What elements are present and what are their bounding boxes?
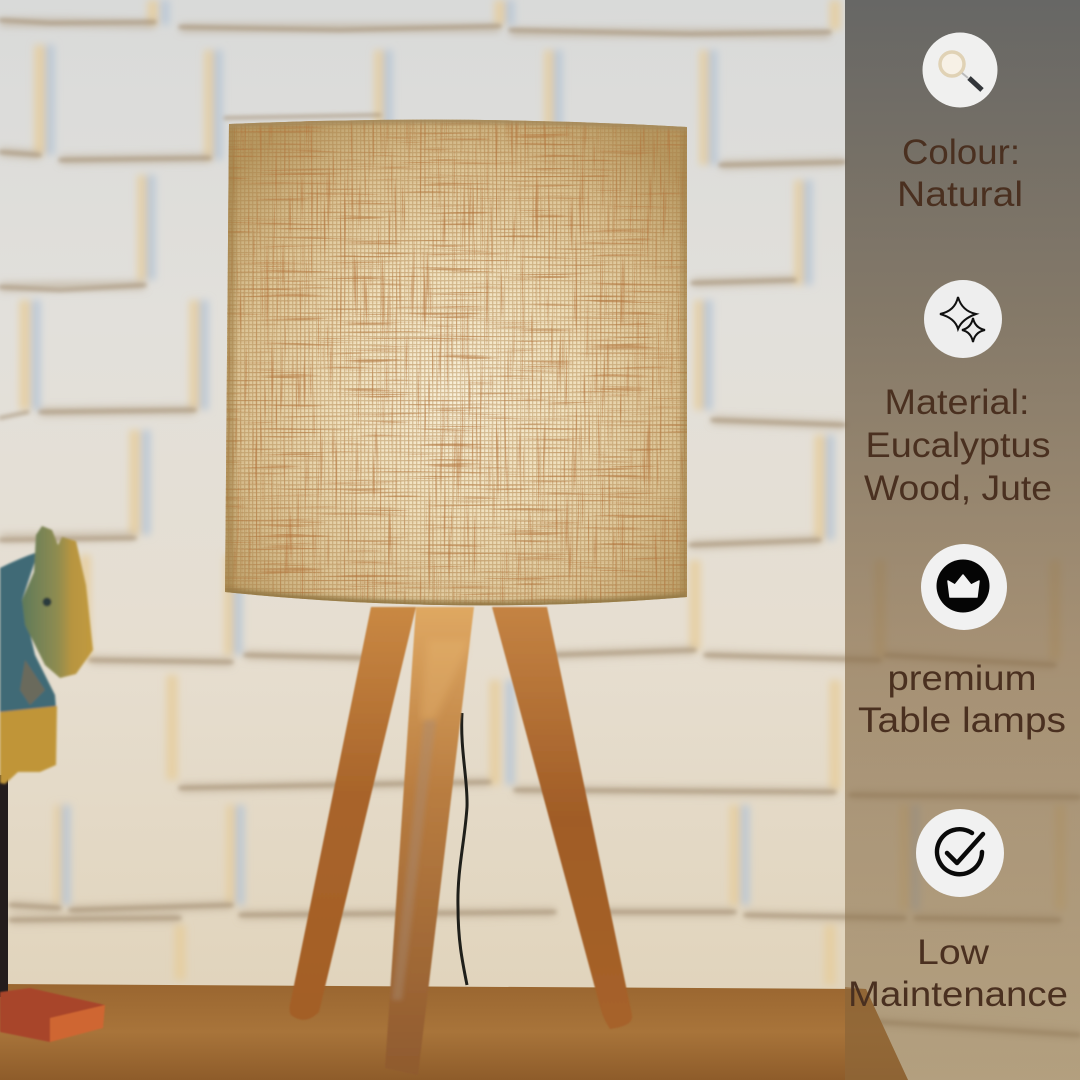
label: low maintenance: Maintenance xyxy=(848,975,1068,1014)
horse stand base xyxy=(0,988,105,1042)
lamp shade xyxy=(220,110,700,620)
label: material: Wood, Jute xyxy=(864,469,1052,508)
label: colour natural: Natural xyxy=(897,175,1023,214)
spec: material xyxy=(864,280,1052,508)
shade edge shading xyxy=(225,120,687,605)
wooden table top xyxy=(0,984,908,1080)
right leg xyxy=(492,607,632,1029)
label: colour natural: Colour: xyxy=(902,133,1020,172)
label: material: Material: xyxy=(884,383,1030,422)
left leg xyxy=(290,607,416,1020)
centre leg xyxy=(385,607,474,1075)
panel: specs sidebar xyxy=(845,0,1080,1080)
jute thread texture xyxy=(220,110,700,620)
horse body xyxy=(0,526,93,784)
label: material xyxy=(864,383,1052,508)
icon: magnifying glass xyxy=(922,32,998,108)
icon: check mark xyxy=(916,809,1004,897)
toy horse xyxy=(0,526,105,1042)
spec: colour xyxy=(897,32,1023,214)
label: material: Eucalyptus xyxy=(866,426,1050,465)
label: low maintenance: Low xyxy=(917,933,990,972)
label: colour natural xyxy=(897,133,1023,214)
spec: premium xyxy=(858,544,1066,740)
spec: maintenance xyxy=(848,809,1068,1014)
label: premium table lamps xyxy=(858,659,1066,740)
horse stand pole xyxy=(0,775,8,997)
label: premium table lamps: Table lamps xyxy=(858,701,1066,740)
icon: crown xyxy=(921,544,1007,630)
label: low maintenance xyxy=(848,933,1068,1014)
power cord xyxy=(458,713,467,985)
icon: sparkles xyxy=(924,280,1002,358)
tripod legs xyxy=(290,607,632,1075)
label: premium table lamps: premium xyxy=(888,659,1036,698)
